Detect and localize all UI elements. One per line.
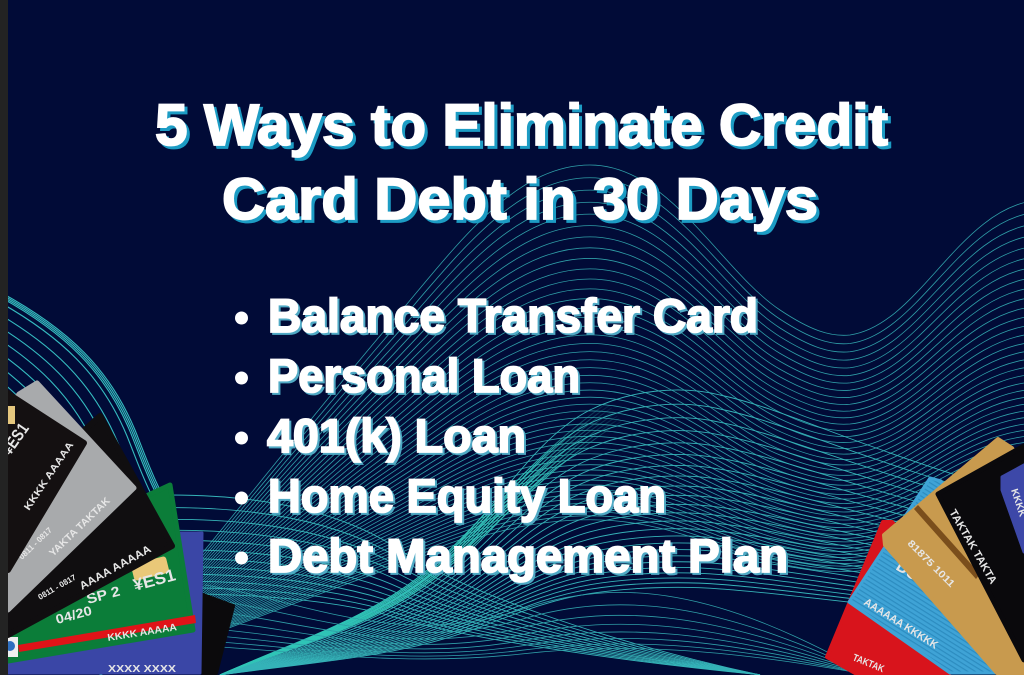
- card: gold: 81875 1011: [905, 538, 957, 590]
- item: balance transfer card: Balance Transfer Card: [268, 289, 758, 342]
- wave lines: ridge family: [220, 390, 1024, 675]
- card: green: KKKK AAAAA: [107, 622, 178, 644]
- left dark strip: [0, 0, 8, 675]
- left card fan: [0, 383, 233, 675]
- card: black middle: 0811 - 0817: [36, 573, 78, 602]
- wave lines: bright arc behind left cards: [0, 292, 160, 545]
- wave: bright teal band: [218, 402, 621, 675]
- card: red: [827, 522, 960, 675]
- wave lines: descending left family: [170, 495, 760, 675]
- title: 5 Ways to Eliminate Credit: [155, 93, 888, 158]
- item: debt management plan: Debt Management Plan: [268, 529, 788, 582]
- card: silver: YAKTA TAKTAK: [47, 495, 113, 559]
- right card fan: [827, 439, 1024, 675]
- card: small black card at back: [203, 595, 233, 673]
- title: [155, 93, 888, 232]
- card: black middle: [8, 416, 172, 635]
- wave lines: bottom family: [205, 585, 870, 675]
- card: blue: XXXX XXXX: [108, 664, 176, 675]
- card: silver: [8, 383, 134, 610]
- item: personal loan: Personal Loan: [268, 349, 580, 402]
- card: purple blue: [1002, 465, 1024, 552]
- card: green: ¥ES1: [131, 565, 178, 595]
- card: light blue: AAAAAA KKKKK: [861, 596, 940, 652]
- card: black front: KKKK AAAAA: [22, 440, 76, 513]
- wave lines: mountain family: [100, 165, 1024, 675]
- card: silver: 0811 - 0817: [17, 525, 54, 561]
- card: green: [5, 485, 196, 661]
- card: black front: [0, 393, 84, 570]
- item: 401(k) loan: 401(k) Loan: [267, 409, 526, 462]
- item: home equity loan: Home Equity Loan: [268, 469, 666, 522]
- card: blue: [8, 533, 202, 675]
- card: light blue: DUS: [893, 558, 931, 590]
- card: gold: [884, 439, 1024, 673]
- title: Card Debt in 30 Days: [222, 167, 818, 232]
- card: black middle: AAAA AAAAA: [78, 543, 153, 593]
- card: green: SP 2: [85, 583, 122, 607]
- bullet list: [235, 289, 788, 582]
- card: black: [938, 446, 1024, 660]
- card: green: 04/20: [54, 603, 94, 627]
- card: light blue: [849, 478, 1024, 673]
- card: black: TAKTAK TAKTA: [946, 508, 999, 586]
